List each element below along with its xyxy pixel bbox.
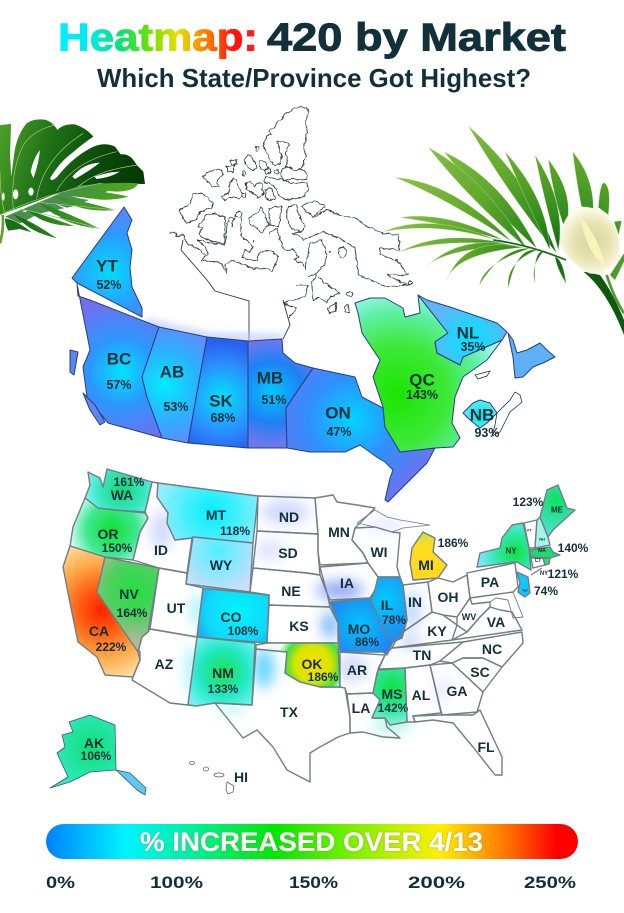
state: Indiana: IN xyxy=(408,594,422,610)
soft glow above prairie provinces xyxy=(145,322,282,338)
province: Ontario: 47% xyxy=(326,425,352,439)
province: Quebec: QC xyxy=(409,370,435,390)
heat halos xyxy=(150,500,450,731)
state: Washington: WA xyxy=(111,487,133,503)
state: Mississippi xyxy=(372,668,409,725)
province: Saskatchewan: SK xyxy=(209,392,234,410)
state: Pennsylvania xyxy=(467,563,518,598)
state: Kansas xyxy=(267,605,338,643)
state: Oregon xyxy=(70,498,148,560)
state: Virginia xyxy=(452,607,522,640)
state: Oklahoma xyxy=(256,643,340,687)
state: North Carolina xyxy=(440,632,523,667)
state: Michigan xyxy=(410,532,469,580)
state: Nevada xyxy=(97,557,159,652)
state: Ohio: OH xyxy=(438,589,458,605)
state: Washington xyxy=(85,469,152,512)
state: Kentucky: KY xyxy=(427,623,447,639)
map: United States xyxy=(50,469,589,795)
state: South Dakota xyxy=(253,531,320,575)
state: Arizona: AZ xyxy=(155,656,174,672)
province: Alberta: 53% xyxy=(163,400,189,414)
state: Oregon: 150% xyxy=(102,541,133,555)
state: Illinois xyxy=(368,577,407,642)
state: Virginia: VA xyxy=(487,614,505,630)
state: Nevada: 164% xyxy=(117,606,148,620)
legend xyxy=(46,824,578,892)
state: Colorado xyxy=(197,588,269,643)
province: Newfoundland and Labrador: NL xyxy=(457,324,479,342)
state: Massachusetts: 140% xyxy=(558,541,589,555)
state: Iowa xyxy=(320,563,378,600)
legend scale: 200%: 200% xyxy=(408,874,465,892)
state: Kentucky xyxy=(392,612,457,648)
state: Arizona xyxy=(132,629,197,705)
state: Massachusetts xyxy=(530,541,589,558)
state: Hawaii: HI xyxy=(234,769,248,785)
state: New Hampshire xyxy=(535,517,550,548)
state: Washington: 161% xyxy=(114,475,145,489)
state: Montana: 118% xyxy=(220,524,250,538)
state: Oregon: OR xyxy=(98,526,118,542)
state: Iowa: IA xyxy=(340,575,354,591)
state: Missouri xyxy=(330,598,393,655)
state: Wisconsin xyxy=(352,527,400,577)
state: Utah xyxy=(150,568,203,637)
state: New Jersey xyxy=(517,572,558,598)
state: North Dakota xyxy=(257,496,318,534)
state: New Jersey: 74% xyxy=(534,584,558,598)
province: Newfoundland and Labrador: 35% xyxy=(460,340,486,354)
province: Saskatchewan: 68% xyxy=(210,411,236,425)
state: Arkansas: AR xyxy=(347,662,367,678)
state: South Dakota: SD xyxy=(278,545,298,561)
icon: palm frond xyxy=(383,126,622,288)
province: New Brunswick: NB xyxy=(470,406,494,424)
state: Maine: 123% xyxy=(513,495,544,509)
state: North Dakota: ND xyxy=(279,509,299,525)
state: Michigan upper peninsula xyxy=(357,510,430,532)
province: Yukon: YT xyxy=(96,256,118,276)
arctic territories outline xyxy=(170,107,412,318)
state: New Mexico xyxy=(188,637,255,706)
state: Ohio xyxy=(428,575,470,617)
state: Oklahoma: 186% xyxy=(308,670,339,684)
state: Maine xyxy=(513,485,575,537)
map: Canada xyxy=(70,107,555,502)
province: Alberta xyxy=(142,327,207,443)
province: Yukon: 52% xyxy=(96,278,122,292)
state: Utah: UT xyxy=(167,600,186,616)
state: New York City: NY xyxy=(540,571,548,577)
state: Georgia: GA xyxy=(446,683,468,699)
state: Alaska: 106% xyxy=(81,749,112,763)
state: Illinois: IL xyxy=(381,597,394,613)
province: Saskatchewan xyxy=(188,337,248,448)
state: Michigan: MI xyxy=(418,557,434,573)
state: Vermont: VT xyxy=(526,528,532,532)
state: Idaho xyxy=(133,482,192,573)
title words: 420 by Market: 420 by Market xyxy=(267,16,566,60)
state: California: CA xyxy=(89,623,109,639)
state: Alabama: AL xyxy=(412,687,431,703)
state: Florida: FL xyxy=(477,739,495,755)
province: Manitoba: MB xyxy=(257,368,283,388)
state: Montana xyxy=(157,483,258,543)
state: Vermont xyxy=(524,520,537,548)
state: Louisiana: LA xyxy=(352,700,370,716)
state: Tennessee: TN xyxy=(413,647,431,663)
state: Rhode Island xyxy=(543,558,550,565)
state: Kansas: KS xyxy=(289,618,309,634)
state: Montana: MT xyxy=(206,507,227,523)
state: West Virginia xyxy=(457,598,490,632)
state: New York City: 121% xyxy=(548,567,579,581)
title xyxy=(58,16,566,60)
state: California xyxy=(63,546,140,677)
province: Manitoba: 51% xyxy=(261,393,287,407)
province: British Columbia: BC xyxy=(107,350,131,368)
state: South Carolina xyxy=(452,658,502,692)
state: Wyoming: WY xyxy=(210,557,233,573)
state: Alaska: AK xyxy=(84,735,104,751)
province: Yukon xyxy=(72,207,142,317)
province: Ontario xyxy=(286,368,435,502)
legend gradient bar xyxy=(46,824,578,859)
legend scale: 150%: 150% xyxy=(289,874,338,892)
state: Idaho: ID xyxy=(154,542,168,558)
province: Ontario: ON xyxy=(325,404,351,422)
state: Indiana xyxy=(402,582,432,638)
state: Hawaii xyxy=(190,762,248,794)
province: British Columbia xyxy=(70,284,162,438)
province: Newfoundland and Labrador xyxy=(418,295,555,378)
state: Colorado: CO xyxy=(220,609,242,625)
state: Missouri: MO xyxy=(348,621,370,637)
state: Wisconsin: WI xyxy=(370,544,388,560)
state: West Virginia: WV xyxy=(462,612,476,622)
state: Mississippi: 142% xyxy=(378,701,409,715)
state: California: 222% xyxy=(96,640,127,654)
state: New Jersey: NJ xyxy=(522,588,528,592)
legend title: % INCREASED OVER 4/13 xyxy=(140,827,483,857)
legend scale: 0%: 0% xyxy=(46,874,75,892)
state: New York xyxy=(477,523,531,570)
state: Nebraska xyxy=(250,568,330,607)
state: Pennsylvania: PA xyxy=(481,574,499,590)
state: Arkansas xyxy=(340,652,385,694)
state: New Mexico: NM xyxy=(212,665,234,681)
state: Alabama xyxy=(405,665,441,722)
state: Connecticut xyxy=(531,558,545,568)
state: South Carolina: SC xyxy=(470,664,490,680)
state: Georgia xyxy=(430,663,483,715)
state: North Carolina: NC xyxy=(482,641,502,657)
state: New York: NY xyxy=(505,546,517,556)
province: Alberta: AB xyxy=(160,362,184,382)
icon: monstera leaf xyxy=(0,119,145,243)
state: New Mexico: 133% xyxy=(208,682,239,696)
province: New Brunswick xyxy=(463,371,522,440)
province: Quebec xyxy=(355,295,502,452)
territorial borders xyxy=(181,240,249,340)
state: Nebraska: NE xyxy=(281,583,301,599)
legend scale: 100%: 100% xyxy=(150,874,203,892)
province: British Columbia: 57% xyxy=(106,378,132,392)
state: Nevada: NV xyxy=(119,586,139,602)
province: Manitoba xyxy=(248,339,313,448)
state: Florida xyxy=(413,710,502,775)
legend scale: 250%: 250% xyxy=(524,874,576,892)
state: Illinois: 78% xyxy=(382,613,406,627)
state: Colorado: 108% xyxy=(228,624,259,638)
state: Texas: TX xyxy=(280,704,299,720)
state: Texas xyxy=(215,649,350,782)
province: Quebec: 143% xyxy=(406,388,438,402)
state: Minnesota: MN xyxy=(328,524,350,540)
subtitle: Which State/Province Got Highest? xyxy=(97,63,531,93)
state: Minnesota xyxy=(315,495,375,565)
state: Michigan: 186% xyxy=(438,536,469,550)
state: New York City xyxy=(531,567,579,581)
state: New Hampshire: NH xyxy=(539,536,545,542)
state: Mississippi: MS xyxy=(382,686,402,702)
title word: Heatmap: Heatmap: xyxy=(58,16,258,60)
province: New Brunswick: 93% xyxy=(474,426,500,440)
state: Missouri: 86% xyxy=(355,635,379,649)
icon: white flower xyxy=(560,207,624,335)
state: Massachusetts: MA xyxy=(538,548,546,554)
state: Wyoming xyxy=(186,537,253,592)
state: Connecticut: CT xyxy=(535,558,541,564)
state: Maine: ME xyxy=(551,506,564,514)
state: Tennessee xyxy=(378,642,463,669)
state: Maryland and Delaware xyxy=(470,592,523,618)
state: Louisiana xyxy=(347,693,400,738)
state: Alaska xyxy=(50,715,146,795)
state: Oklahoma: OK xyxy=(302,656,322,672)
